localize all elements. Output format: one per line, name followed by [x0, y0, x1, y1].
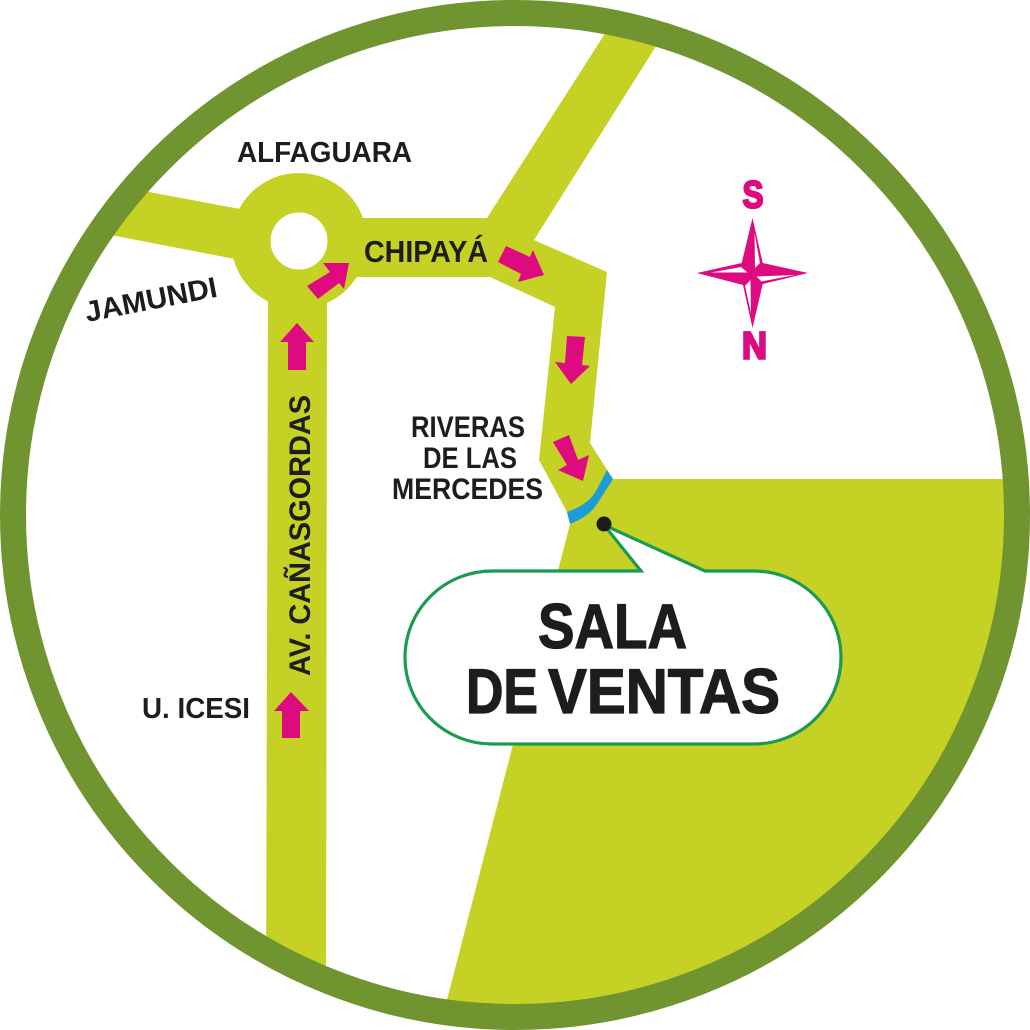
location dot [596, 516, 612, 532]
label: Av. Cañasgordas: AV. CAÑASGORDAS [283, 395, 317, 676]
label: Riveras de las Mercedes: RIVERAS [411, 411, 525, 444]
road: Jamundi [114, 192, 240, 259]
compass letter N: N [742, 326, 767, 368]
arrow: upper avenue [280, 323, 314, 370]
road: Av. Cañasgordas [266, 290, 327, 1010]
callout: sala de ventas [405, 516, 841, 744]
callout heading: VENTAS [548, 657, 780, 727]
arrow: to entrance [553, 435, 589, 481]
arrow: lower avenue [274, 692, 309, 738]
label: Jamundi: JAMUNDI [82, 272, 220, 329]
callout heading [466, 592, 780, 727]
callout heading: DE [466, 657, 538, 727]
road: Chipayá and plot area [356, 34, 1004, 1004]
callout bubble [405, 525, 841, 744]
arrow: southbound [555, 336, 590, 384]
compass letter S: S [742, 174, 764, 216]
arrow: into roundabout exit [307, 263, 349, 299]
compass [697, 174, 808, 368]
route arrows [274, 246, 590, 738]
label: Riveras de las Mercedes: DE LAS [423, 442, 517, 475]
label: U. Icesi: U. ICESI [142, 693, 250, 725]
roundabout centre island [270, 212, 328, 270]
label: Riveras de las Mercedes: MERCEDES [392, 473, 543, 506]
blue entrance band [567, 470, 613, 524]
roundabout [231, 173, 367, 309]
label: Riveras de las Mercedes [392, 411, 543, 506]
arrow: Chipayá [498, 246, 544, 282]
label: Alfaguara: ALFAGUARA [237, 137, 412, 169]
label: Chipayá: CHIPAYÁ [364, 234, 488, 269]
callout heading: SALA [538, 592, 687, 662]
compass star [697, 218, 808, 328]
